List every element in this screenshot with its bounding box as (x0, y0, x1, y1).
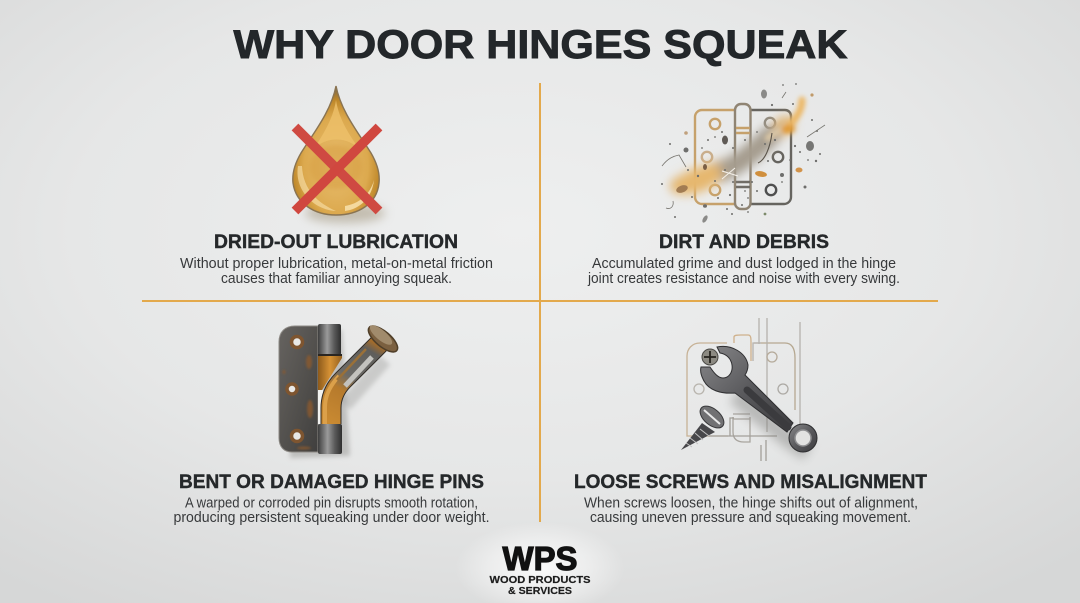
screw head with cross (702, 349, 718, 365)
panel: dried-out lubrication (180, 86, 493, 287)
bent pin (331, 343, 380, 424)
body text: causing uneven pressure and squeaking movement. (590, 510, 911, 526)
icon: red X (295, 127, 379, 211)
panel: dirt and debris (587, 83, 900, 287)
title: WHY DOOR HINGES SQUEAK (234, 23, 848, 67)
heading: LOOSE SCREWS AND MISALIGNMENT (574, 472, 927, 493)
divider: vertical and horizontal gold cross (142, 83, 938, 522)
body text: causes that familiar annoying squeak. (221, 271, 452, 287)
panel: bent or damaged hinge pins (174, 322, 490, 526)
hinge knuckles (318, 390, 323, 424)
hinge plate (279, 326, 318, 452)
logo mark: WPS (502, 540, 578, 577)
dust cloud (669, 124, 786, 200)
body text: When screws loosen, the hinge shifts out of alignment, (584, 496, 918, 512)
debris specks and chips (661, 83, 821, 223)
body text: producing persistent squeaking under door weight. (174, 510, 490, 526)
body text: A warped or corroded pin disrupts smooth rotation, (185, 496, 478, 512)
hinge outline (695, 104, 791, 209)
wrench (701, 346, 817, 452)
logo: WPS Wood Products & Services (455, 522, 625, 603)
body text: Without proper lubrication, metal-on-metal friction (180, 256, 493, 272)
icon: wrench, screws and misaligned hinge (681, 318, 817, 461)
body text: joint creates resistance and noise with every swing. (587, 271, 900, 287)
heading: DIRT AND DEBRIS (659, 232, 829, 253)
heading: BENT OR DAMAGED HINGE PINS (179, 472, 484, 493)
loose screw (681, 402, 728, 450)
logo wordmark: WOOD PRODUCTS (490, 574, 590, 586)
logo wordmark: & SERVICES (508, 585, 572, 597)
misaligned hinge outline (687, 318, 800, 461)
icon: bent rusty hinge (279, 322, 402, 458)
icon: hinge with debris (661, 83, 825, 223)
panel: loose screws and misalignment (574, 318, 927, 526)
heading: DRIED-OUT LUBRICATION (214, 232, 458, 253)
icon: oil drop crossed out (293, 86, 385, 223)
pin head (364, 322, 402, 356)
body text: Accumulated grime and dust lodged in the hinge (592, 256, 896, 272)
